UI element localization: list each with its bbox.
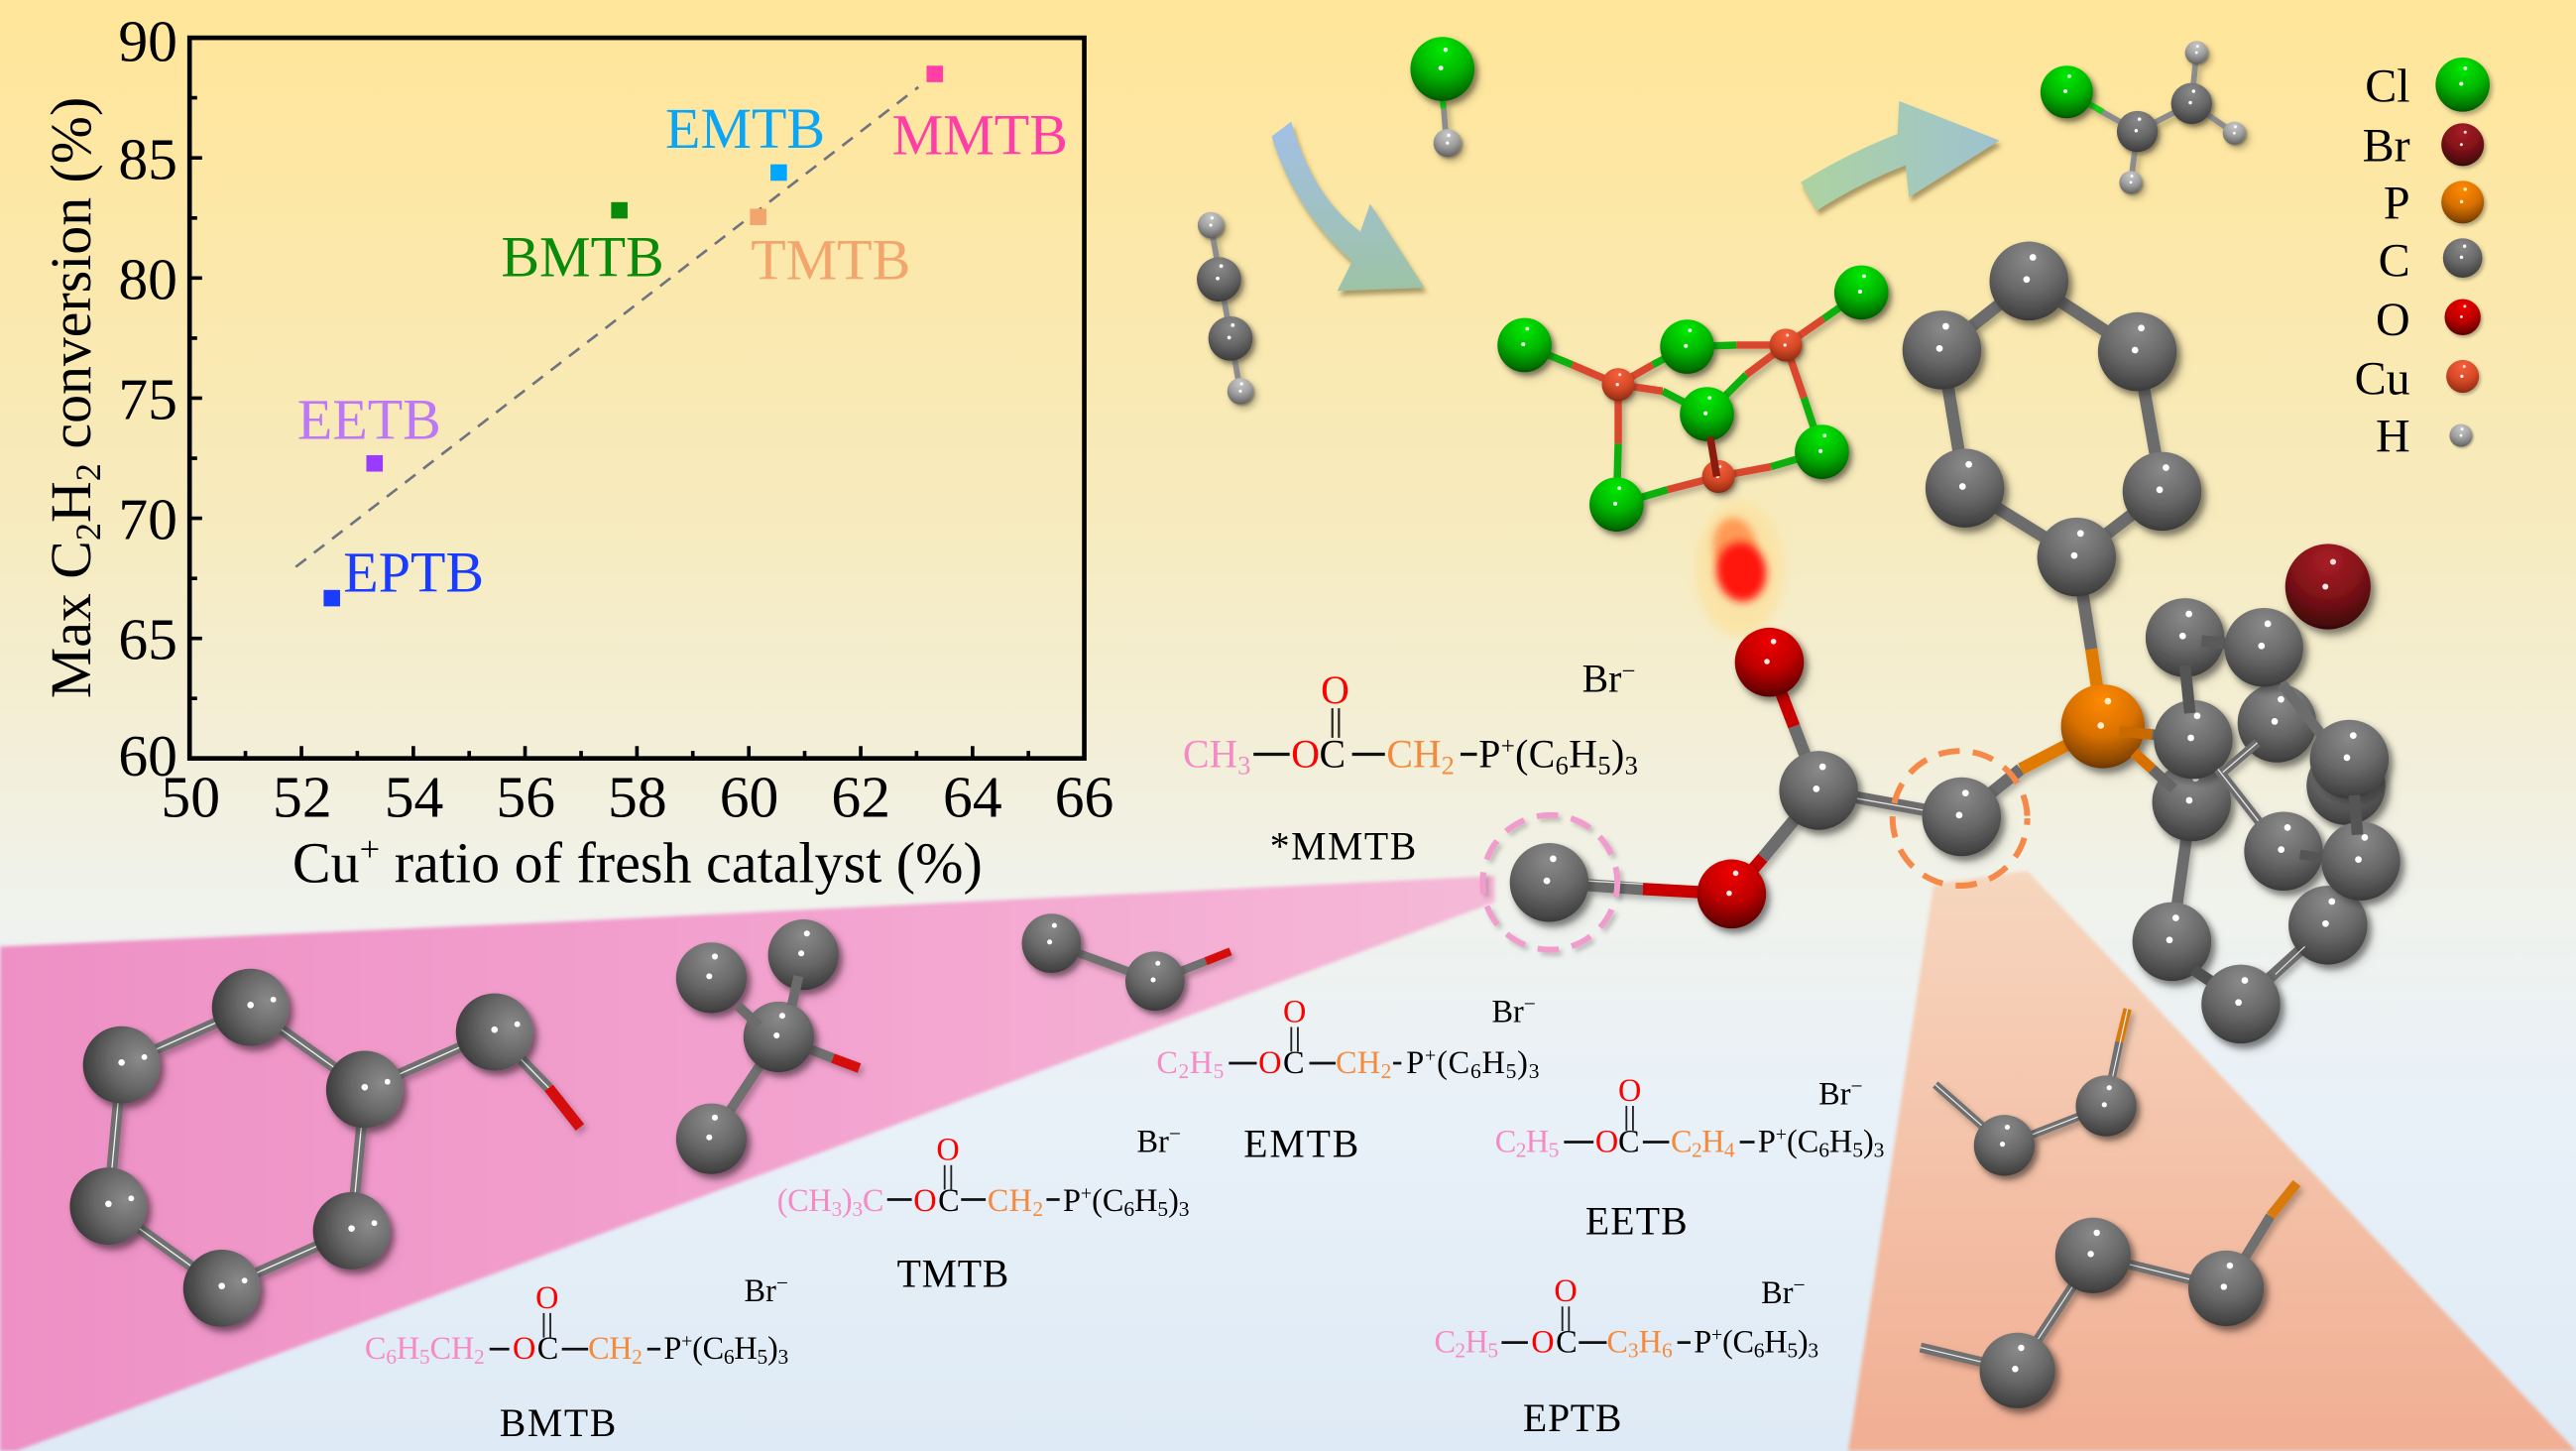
formula: TMTB: C — [863, 1182, 883, 1218]
formula: BMTB: 6 — [386, 1345, 397, 1369]
crossing bonds — [2218, 743, 2259, 821]
formula: TMTB: 3 — [852, 1197, 863, 1221]
y axis tick labels: 80 — [118, 247, 177, 312]
formula: BMTB: + — [681, 1331, 692, 1353]
legend labels: Br — [2363, 119, 2410, 172]
formula: TMTB: 6 — [1123, 1197, 1134, 1221]
formula: EPTB: 3 — [1628, 1339, 1639, 1363]
fragment: ethylene chain — [1935, 1009, 2137, 1175]
legend labels: P — [2384, 177, 2410, 229]
formula: BMTB: 6 — [724, 1345, 735, 1369]
formula: TMTB: ) — [1168, 1182, 1179, 1218]
y axis tick labels: 60 — [118, 723, 177, 788]
near atoms — [2244, 811, 2323, 891]
formula: MMTB: *MMTB — [1270, 825, 1416, 869]
element legend — [2355, 58, 2490, 463]
lower phenyl bonds — [2171, 802, 2328, 1004]
ester and phenyl atoms — [1989, 242, 2068, 320]
formula: MMTB: CH — [1386, 733, 1442, 777]
formula: EETB: EETB — [1585, 1199, 1688, 1243]
legend labels: C — [2379, 234, 2410, 287]
x axis tick labels: 56 — [496, 764, 555, 829]
formula: BMTB: P — [663, 1330, 681, 1366]
formula: BMTB: Br — [745, 1272, 776, 1308]
formula: EPTB: + — [1711, 1324, 1722, 1346]
formula: EPTB: ) — [1798, 1324, 1809, 1360]
arrow: reactants into catalyst — [1271, 122, 1425, 291]
formula: TMTB: + — [1081, 1183, 1092, 1205]
y axis tick labels — [118, 8, 177, 788]
y axis tick labels: 75 — [118, 366, 177, 431]
formula: BMTB: 3 — [778, 1345, 788, 1369]
legend atoms — [2435, 58, 2490, 447]
data point EPTB: EPTB — [343, 540, 484, 604]
formula: EMTB: + — [1425, 1044, 1436, 1066]
formula: TMTB — [777, 1122, 1190, 1295]
formula: TMTB: H — [1134, 1182, 1157, 1218]
formula: BMTB: 2 — [474, 1345, 485, 1369]
formula: EPTB: (C — [1722, 1324, 1754, 1360]
formula: TMTB: 5 — [1157, 1197, 1168, 1221]
formula: MMTB: 3 — [1625, 750, 1638, 780]
x axis tick labels: 66 — [1055, 764, 1113, 829]
formula: EPTB: O — [1554, 1272, 1578, 1308]
formula: BMTB: (C — [692, 1330, 724, 1366]
formula: EETB: + — [1776, 1124, 1787, 1146]
formula: TMTB: TMTB — [897, 1252, 1008, 1295]
formula: MMTB: 3 — [1237, 750, 1250, 780]
formula: BMTB: CH — [588, 1330, 633, 1366]
formula: TMTB: O — [936, 1132, 960, 1167]
dashed highlight: methylene group — [1893, 751, 2028, 886]
trend line — [295, 87, 918, 567]
formula: EMTB: O — [1283, 994, 1306, 1029]
formula: TMTB: 3 — [831, 1197, 842, 1221]
formula: EPTB: C — [1556, 1324, 1578, 1360]
formula: EPTB: 5 — [1487, 1339, 1498, 1363]
formula: EMTB: − — [1524, 992, 1536, 1016]
formula: BMTB: CH — [430, 1330, 474, 1366]
formula: MMTB: (C — [1515, 733, 1555, 777]
x axis tick labels — [161, 764, 1113, 829]
red interaction glow — [1696, 501, 1784, 636]
formula: EMTB: Br — [1491, 994, 1524, 1029]
formula: TMTB: Br — [1137, 1123, 1169, 1158]
formula: EETB: − — [1850, 1074, 1863, 1098]
formula: EMTB: 6 — [1470, 1059, 1481, 1083]
formula: EETB: H — [1829, 1123, 1852, 1158]
x axis tick labels: 50 — [161, 764, 220, 829]
plot frame and ticks — [189, 38, 1085, 759]
formula: TMTB: P — [1063, 1182, 1081, 1218]
x axis title: ratio of fresh catalyst (%) — [380, 831, 983, 896]
formula: MMTB: 2 — [1442, 750, 1455, 780]
formula: TMTB: (C — [1092, 1182, 1123, 1218]
formula: EMTB: CH — [1336, 1044, 1380, 1080]
y axis tick labels: 65 — [118, 606, 177, 671]
formula: MMTB: C — [1319, 733, 1346, 777]
formula: EETB: 5 — [1549, 1138, 1559, 1161]
formula: BMTB — [365, 1271, 788, 1445]
formula: EMTB: C — [1156, 1044, 1178, 1080]
legend labels: H — [2376, 411, 2410, 463]
data point EETB: EETB — [297, 387, 441, 451]
formula: EMTB: H — [1190, 1044, 1213, 1080]
molecule: MMTB ball-and-stick — [1510, 242, 2400, 1043]
molecule: CuCl catalyst cluster — [1497, 266, 1889, 532]
x axis title: Cu — [293, 831, 360, 896]
formula: EMTB: O — [1258, 1044, 1282, 1080]
x axis tick labels: 54 — [385, 764, 443, 829]
formula: MMTB: P — [1478, 733, 1500, 777]
formula: EETB: O — [1595, 1123, 1618, 1158]
formula: TMTB: ) — [842, 1182, 853, 1218]
formula: BMTB: BMTB — [500, 1401, 616, 1445]
formula: EETB: 4 — [1724, 1138, 1735, 1161]
formula: EPTB: C — [1434, 1324, 1456, 1360]
formula: EMTB: C — [1283, 1044, 1305, 1080]
legend labels: Cu — [2355, 353, 2410, 406]
formula: EETB: P — [1758, 1123, 1776, 1158]
formula: EPTB: EPTB — [1523, 1396, 1621, 1440]
formula: EETB: ) — [1863, 1123, 1874, 1158]
data point BMTB: BMTB — [501, 224, 664, 289]
formula: BMTB: H — [734, 1330, 758, 1366]
formula: TMTB: C — [938, 1182, 960, 1218]
formula: EMTB: 5 — [1506, 1059, 1516, 1083]
formula: BMTB: H — [397, 1330, 419, 1366]
x axis tick labels: 58 — [608, 764, 667, 829]
y axis title: conversion (%) — [39, 97, 103, 463]
y axis tick labels: 85 — [118, 127, 177, 192]
formula: EPTB: 3 — [1808, 1339, 1818, 1363]
formula: EETB: H — [1701, 1123, 1725, 1158]
formula: BMTB: 2 — [632, 1345, 643, 1369]
formula: EPTB: 2 — [1455, 1339, 1465, 1363]
data point MMTB: MMTB — [892, 103, 1068, 168]
formula: EETB: Br — [1818, 1075, 1850, 1111]
formula: TMTB: O — [913, 1182, 937, 1218]
y axis title: 2 — [68, 463, 108, 481]
formula: EETB: C — [1671, 1123, 1693, 1158]
formula: BMTB: C — [365, 1330, 386, 1366]
formula: MMTB: O — [1321, 668, 1349, 712]
x axis tick labels: 52 — [273, 764, 332, 829]
y axis tick labels: 90 — [118, 8, 177, 73]
x axis tick labels: 60 — [720, 764, 778, 829]
formula: BMTB: 5 — [758, 1345, 767, 1369]
formula: MMTB: CH — [1183, 733, 1237, 777]
x axis title: + — [360, 829, 380, 869]
y axis title: Max C — [39, 541, 103, 698]
formula: BMTB: ) — [767, 1330, 778, 1366]
formula: EETB: H — [1526, 1123, 1549, 1158]
formula: TMTB: (CH — [777, 1182, 832, 1218]
formula: BMTB: O — [535, 1279, 558, 1315]
formula: EETB: O — [1618, 1072, 1641, 1108]
formula: TMTB: CH — [988, 1182, 1032, 1218]
formula: BMTB: − — [776, 1271, 788, 1295]
pink projection wedge — [0, 876, 1495, 1451]
molecule: vinyl chloride — [2041, 41, 2246, 194]
formula: EMTB: P — [1406, 1044, 1424, 1080]
scatter plot panel — [39, 8, 1113, 896]
data point MMTB — [892, 65, 1068, 168]
formula: EPTB: O — [1531, 1324, 1555, 1360]
fragment: tert-butyl group — [676, 919, 860, 1174]
formula: EPTB: H — [1764, 1324, 1788, 1360]
formula: MMTB: − — [1621, 658, 1635, 684]
formula: EETB — [1495, 1072, 1884, 1243]
formula: EETB: C — [1495, 1123, 1516, 1158]
formula: EMTB: 3 — [1529, 1059, 1540, 1083]
x axis tick labels: 64 — [943, 764, 1002, 829]
formula: EETB: C — [1618, 1123, 1640, 1158]
formula: BMTB: C — [537, 1330, 558, 1366]
arrow: catalyst to product — [1801, 101, 1999, 210]
formula: EMTB: ) — [1517, 1044, 1528, 1080]
molecule: HCl — [1410, 37, 1474, 157]
dashed highlight: methyl group — [1482, 815, 1617, 950]
formula: MMTB: O — [1291, 733, 1320, 777]
formula: EMTB: 2 — [1381, 1059, 1391, 1083]
far atoms — [2133, 903, 2211, 981]
formula: EMTB: H — [1482, 1044, 1505, 1080]
formula: EPTB — [1434, 1272, 1818, 1440]
formula: EMTB: EMTB — [1243, 1122, 1358, 1165]
formula: EMTB — [1156, 992, 1540, 1165]
formula: TMTB: − — [1169, 1122, 1181, 1146]
formula: EPTB: − — [1793, 1272, 1806, 1296]
formula: EPTB: H — [1465, 1324, 1488, 1360]
formula: TMTB: 2 — [1032, 1197, 1043, 1221]
legend labels — [2355, 60, 2410, 463]
orange projection wedge — [1848, 871, 2576, 1451]
formula: EETB: 2 — [1692, 1138, 1702, 1161]
y axis title: 2 — [68, 523, 108, 541]
fragment: propylene chain — [1921, 1183, 2296, 1408]
formula: BMTB: O — [513, 1330, 535, 1366]
data point EMTB: EMTB — [665, 96, 825, 161]
formula: EETB: 6 — [1818, 1138, 1829, 1161]
formula: EMTB: (C — [1437, 1044, 1469, 1080]
formula: EPTB: P — [1694, 1324, 1711, 1360]
fragment: ethyl group — [1022, 913, 1230, 1011]
phosphorus centre — [2061, 684, 2145, 769]
y axis tick labels: 70 — [118, 486, 177, 551]
legend labels: O — [2376, 294, 2410, 346]
x axis tick labels: 62 — [831, 764, 890, 829]
formula: TMTB: 3 — [1179, 1197, 1190, 1221]
formula: EPTB: Br — [1761, 1274, 1793, 1310]
formula: EETB: 2 — [1516, 1138, 1526, 1161]
formula: EPTB: 6 — [1754, 1339, 1765, 1363]
legend labels: Cl — [2365, 60, 2410, 113]
formula: MMTB: Br — [1582, 658, 1621, 701]
formula: EPTB: H — [1639, 1324, 1662, 1360]
formula: MMTB: H — [1569, 733, 1597, 777]
formula: MMTB — [1183, 658, 1638, 869]
formula: EMTB: 2 — [1179, 1059, 1189, 1083]
formula: MMTB: ) — [1611, 733, 1624, 777]
formula: EMTB: 5 — [1214, 1059, 1224, 1083]
formula: EPTB: 6 — [1662, 1339, 1673, 1363]
y axis title: H — [39, 481, 103, 523]
formula: EETB: (C — [1787, 1123, 1818, 1158]
formula: EETB: 5 — [1852, 1138, 1863, 1161]
molecule: acetylene — [1197, 212, 1253, 405]
formula: EETB: 3 — [1874, 1138, 1884, 1161]
formula: BMTB: 5 — [419, 1345, 430, 1369]
formula: EPTB: C — [1606, 1324, 1628, 1360]
data point TMTB: TMTB — [751, 228, 910, 293]
phenyl ring and ester bonds — [1549, 281, 2162, 894]
formula: EPTB: 5 — [1787, 1339, 1798, 1363]
bond highlights — [1585, 797, 1932, 884]
formula: MMTB: 5 — [1597, 750, 1611, 780]
fragment: benzyl group — [69, 969, 580, 1327]
formula: MMTB: 6 — [1556, 750, 1569, 780]
formula: MMTB: + — [1501, 733, 1515, 760]
